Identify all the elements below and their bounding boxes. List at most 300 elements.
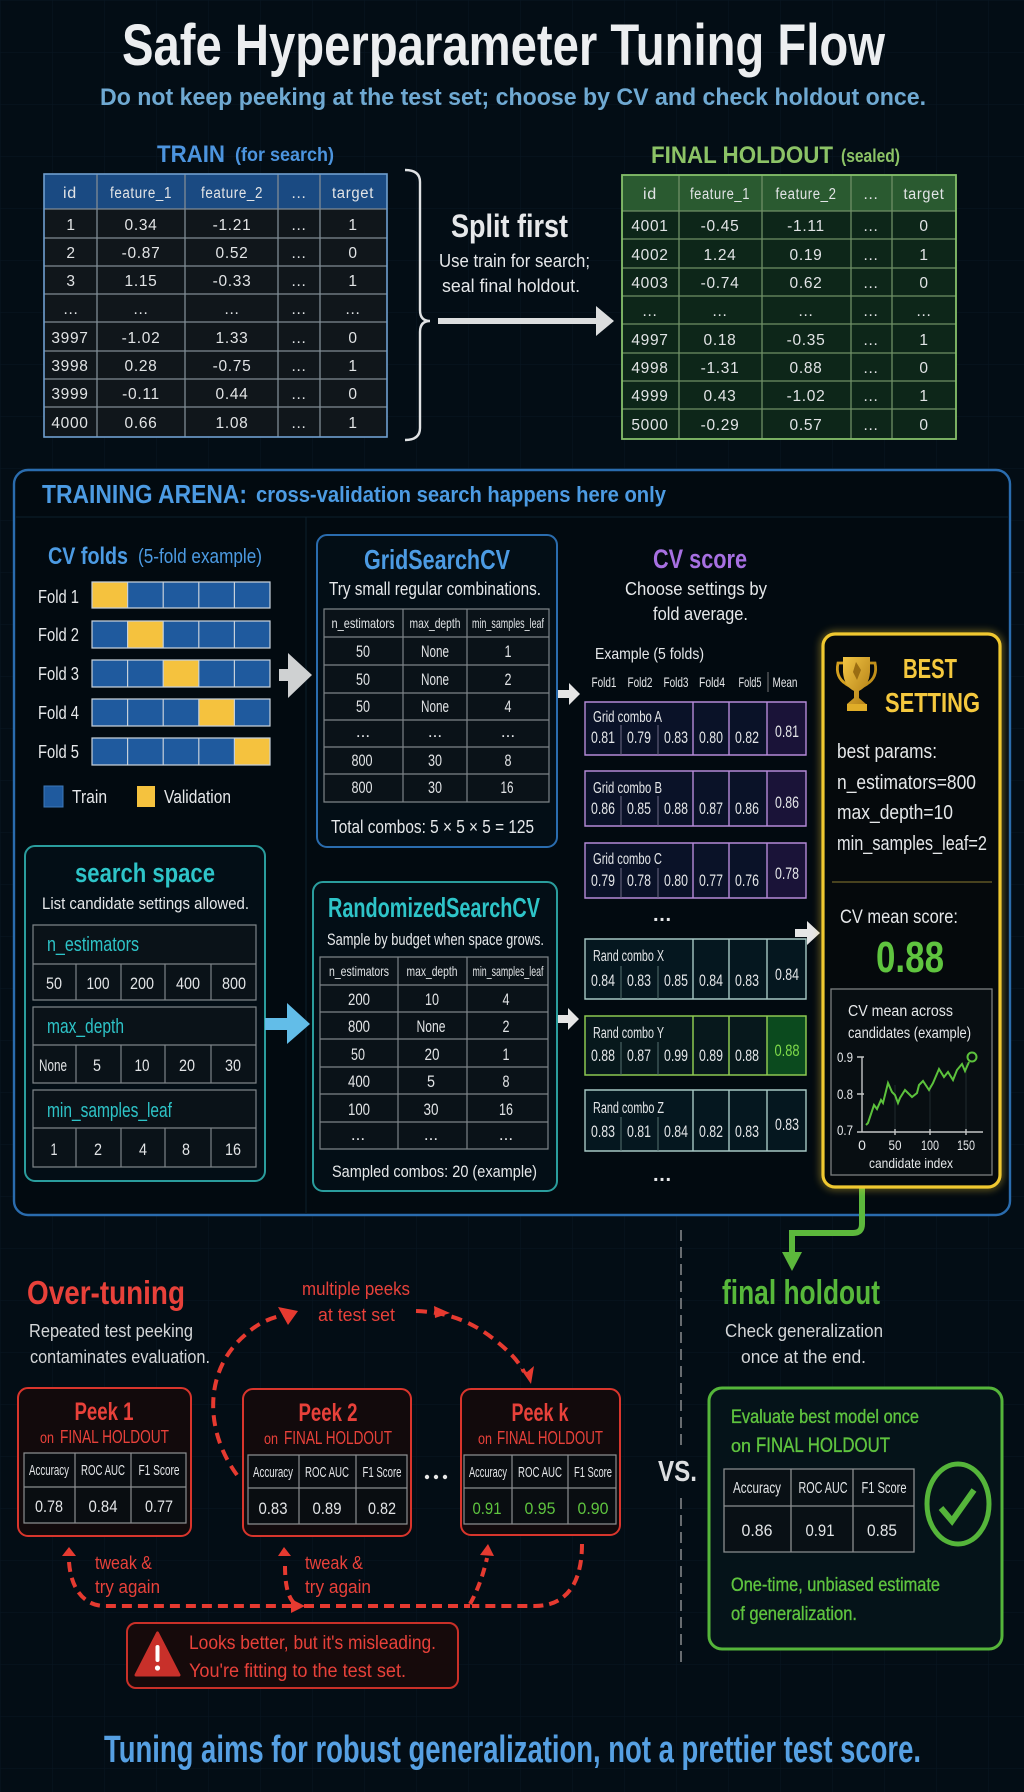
fold column headers: Fold1	[592, 674, 617, 690]
card: peek 2: Peek 2	[298, 1399, 358, 1427]
row: rand combo X: 0.84	[699, 972, 723, 990]
card: peek 1: FINAL HOLDOUT	[60, 1426, 169, 1447]
table: grid combos: 30	[428, 778, 442, 797]
fold column headers	[592, 672, 798, 692]
card: peek 2: Accuracy	[253, 1464, 293, 1481]
vs divider: VS.	[658, 1456, 697, 1488]
row: rand combo Z: 0.82	[699, 1123, 723, 1141]
card: evaluate once: FINAL HOLDOUT	[756, 1434, 890, 1457]
row: grid combo B: 0.85	[627, 800, 651, 818]
bracket	[405, 170, 430, 440]
card: peek k: 0.90	[578, 1499, 608, 1518]
over-tuning description: contaminates evaluation.	[30, 1347, 210, 1367]
panel: grid search	[317, 535, 557, 847]
label: tweak and try again 2	[305, 1553, 371, 1597]
table: final holdout data: -0.35	[787, 332, 825, 349]
table: train data: target	[332, 185, 374, 202]
chart: cv mean across candidates: 100	[921, 1137, 939, 1153]
table: final holdout data: ...	[916, 303, 932, 320]
table: train data: 3997	[51, 330, 89, 347]
fold column headers: Fold5	[738, 674, 762, 690]
table: min_samples_leaf: 2	[94, 1140, 102, 1159]
fold diagram: Fold 1	[38, 587, 79, 607]
panel: over-tuning	[18, 1274, 620, 1688]
row: rand combo Y: 0.99	[664, 1047, 688, 1065]
fold diagram: Fold 2	[38, 625, 79, 645]
row: grid combo A: 0.81	[591, 729, 615, 747]
chart: cv mean across candidates: 150	[957, 1137, 975, 1153]
table: final holdout data: 4002	[631, 247, 669, 264]
best params: max_depth=10	[837, 802, 953, 824]
table: sampled combos: 5	[427, 1072, 435, 1091]
chart: cv mean across candidates: candidate index	[869, 1155, 953, 1171]
row: grid combo C: 0.78	[775, 865, 799, 883]
table: train data: 0	[348, 386, 358, 403]
table: train data: -0.11	[122, 386, 160, 403]
table: final holdout data: 1	[919, 388, 929, 405]
heading: randomized search: RandomizedSearchCV	[328, 892, 540, 923]
row: grid combo B: 0.87	[699, 800, 723, 818]
table: sampled combos: ...	[351, 1125, 365, 1144]
table: final holdout data: 0.18	[704, 332, 736, 349]
table: grid combos: 8	[504, 751, 512, 770]
card: peek k	[461, 1389, 620, 1535]
chart: cv mean across candidates: 0.8	[837, 1086, 853, 1102]
row: grid combo C: 0.76	[735, 872, 759, 890]
fold diagram: Fold 4	[38, 703, 79, 723]
final holdout description: once at the end.	[741, 1347, 866, 1367]
panel: search space	[25, 846, 265, 1181]
fold diagram: Fold 5	[38, 742, 79, 762]
table: final holdout data: -0.29	[701, 417, 739, 434]
cv mean score: 0.88	[876, 933, 944, 982]
table: max_depth: max_depth	[47, 1016, 124, 1038]
table: final holdout data: ...	[863, 186, 879, 203]
table: final holdout data: ...	[863, 417, 879, 434]
table: sampled combos: 30	[424, 1100, 438, 1119]
fold column headers: Fold2	[628, 674, 653, 690]
table: train data: id	[63, 185, 77, 202]
table: grid combos: None	[421, 642, 449, 661]
text: split first: Split first	[451, 208, 568, 244]
arrow: grid search to scores	[558, 683, 580, 705]
row: rand combo X	[585, 939, 806, 999]
cv score description	[625, 579, 767, 624]
table: holdout metrics: 0.91	[806, 1521, 834, 1540]
row: rand combo Z: 0.83	[591, 1123, 615, 1141]
table: train data: ...	[224, 301, 240, 318]
label: tweak and try again 1: try again	[95, 1577, 160, 1597]
row: grid combo C	[585, 843, 806, 898]
table: final holdout data: feature_2	[776, 186, 836, 203]
table: n_estimators	[33, 925, 256, 1000]
card: peek 2	[243, 1389, 411, 1536]
fold column headers: Mean	[772, 674, 798, 690]
cv mean score	[840, 907, 958, 982]
table: holdout metrics	[724, 1469, 914, 1552]
heading: final holdout: final holdout	[722, 1274, 880, 1312]
table: final holdout data: 0.43	[704, 388, 736, 405]
fold diagram: Fold 3	[38, 664, 79, 684]
legend: Validation	[164, 787, 231, 807]
table: final holdout data: 4999	[631, 388, 669, 405]
table: train data: feature_2	[201, 185, 263, 202]
table: grid combos: None	[421, 697, 449, 716]
card: peek 1: F1 Score	[138, 1462, 180, 1479]
row: grid combo A: 0.81	[775, 723, 799, 741]
card: peek 1: on	[40, 1430, 54, 1447]
card: peek k: 0.95	[524, 1499, 556, 1518]
table: holdout metrics: Accuracy	[733, 1480, 781, 1497]
arena heading: TRAINING ARENA:	[42, 479, 247, 509]
chart: cv mean across candidates: CV mean across	[848, 1003, 953, 1020]
row: grid combo B	[585, 771, 806, 826]
heading: search space: search space	[75, 858, 215, 888]
ellipsis: ...	[653, 904, 671, 926]
text: split first: Use train for search;	[439, 251, 590, 271]
total combos: Total combos: 5 × 5 × 5 = 125	[331, 817, 534, 837]
label: multiple peeks: at test set	[318, 1305, 395, 1325]
label: multiple peeks	[302, 1279, 410, 1325]
row: rand combo X: 0.84	[775, 966, 799, 984]
table: sampled combos: min_samples_leaf	[472, 963, 544, 979]
table: train data: 1.15	[125, 273, 157, 290]
table: sampled combos	[320, 957, 548, 1149]
table: grid combos: max_depth	[410, 615, 460, 631]
table: sampled combos: None	[416, 1017, 446, 1036]
card: peek 1: 0.78	[35, 1497, 63, 1516]
table: final holdout data: ...	[798, 303, 814, 320]
table: holdout metrics: ROC AUC	[798, 1480, 848, 1497]
best params: best params:	[837, 741, 937, 763]
table: grid combos: 800	[352, 778, 372, 797]
card: evaluate once: on	[731, 1436, 751, 1456]
row: rand combo Y: 0.88	[774, 1042, 800, 1060]
best params: min_samples_leaf=2	[837, 833, 987, 855]
chart: cv mean across candidates: 0	[858, 1137, 866, 1153]
table: holdout metrics: 0.86	[742, 1521, 772, 1540]
table: final holdout data: ...	[642, 303, 658, 320]
table: grid combos: n_estimators	[332, 615, 394, 631]
callout: warning	[127, 1623, 458, 1688]
panel: cv score	[585, 544, 806, 1186]
row: rand combo Y: 0.88	[735, 1047, 759, 1065]
warning text: You're fitting to the test set.	[189, 1661, 406, 1682]
table: grid combos: ...	[428, 722, 442, 741]
label: tweak and try again 1	[95, 1553, 160, 1597]
panel: cv folds	[38, 543, 270, 807]
final holdout description	[725, 1321, 883, 1367]
table: grid combos: 50	[356, 642, 370, 661]
table: train data: ...	[291, 245, 307, 262]
card: peek 1: Accuracy	[29, 1462, 69, 1479]
arena heading	[42, 479, 667, 509]
ellipsis: ...	[653, 1164, 671, 1186]
connector: best setting to final holdout	[782, 1187, 862, 1271]
label: tweak and try again 1: tweak &	[95, 1553, 152, 1573]
row: rand combo Z	[585, 1090, 806, 1151]
table: train data: 0.34	[125, 217, 157, 234]
row: grid combo A: 0.83	[664, 729, 688, 747]
heading: best setting: BEST	[903, 653, 957, 684]
chart: cv mean across candidates: 0.9	[837, 1049, 853, 1065]
table: final holdout data: ...	[863, 275, 879, 292]
table: final holdout data: 5000	[631, 417, 669, 434]
table: final holdout data: -1.11	[787, 218, 825, 235]
heading: cv folds: CV folds	[48, 543, 128, 570]
table: final holdout data: 4001	[631, 218, 669, 235]
card: evaluate once	[709, 1388, 1002, 1649]
over-tuning description	[29, 1321, 210, 1367]
table: grid combos: 30	[428, 751, 442, 770]
row: grid combo A: 0.80	[699, 729, 723, 747]
arrow: scores to best setting	[795, 921, 820, 945]
randomized description: Sample by budget when space grows.	[327, 930, 544, 949]
table: final holdout data	[622, 175, 956, 439]
chart: cv mean across candidates: 50	[888, 1137, 902, 1153]
table: train data: 1.33	[216, 330, 248, 347]
table: sampled combos: 1	[502, 1045, 510, 1064]
row: grid combo B: 0.88	[664, 800, 688, 818]
table: final holdout data: 0.19	[790, 247, 822, 264]
legend	[44, 786, 231, 807]
row: grid combo C: Grid combo C	[593, 851, 662, 868]
table: final holdout data: 0	[919, 417, 929, 434]
table: train data: 1.08	[216, 415, 248, 432]
table: train data: 4000	[51, 415, 89, 432]
table: grid combos: 50	[356, 670, 370, 689]
table: train data: ...	[291, 185, 307, 202]
panel: final holdout evaluation	[709, 1274, 1002, 1649]
card: peek k: Peek k	[512, 1399, 569, 1427]
row: grid combo A: 0.82	[735, 729, 759, 747]
row: rand combo Z: 0.84	[664, 1123, 688, 1141]
table: final holdout data: 4003	[631, 275, 669, 292]
table: train data: ...	[291, 217, 307, 234]
card: peek 1: 0.77	[145, 1497, 173, 1516]
card: peek 2: 0.82	[368, 1499, 396, 1518]
panel: randomized search	[313, 882, 557, 1191]
table: train data: -0.75	[213, 358, 251, 375]
search space description: List candidate settings allowed.	[42, 894, 249, 913]
fold column headers: Fold3	[664, 674, 689, 690]
table: train data: feature_1	[110, 185, 172, 202]
table: final holdout data: -1.31	[701, 360, 739, 377]
table: final holdout data: -0.45	[701, 218, 739, 235]
table: grid combos: min_samples_leaf	[472, 615, 544, 631]
table: sampled combos: 400	[348, 1072, 370, 1091]
label: tweak and try again 2: try again	[305, 1577, 371, 1597]
table: train data: -1.21	[213, 217, 251, 234]
table: max_depth: None	[39, 1056, 67, 1075]
table: train data: 1	[66, 217, 76, 234]
table: train data: 0.52	[216, 245, 248, 262]
table: sampled combos: 50	[351, 1045, 365, 1064]
table: final holdout data: id	[643, 186, 657, 203]
table: train data: 1	[348, 415, 358, 432]
table: train data: ...	[291, 415, 307, 432]
label: tweak and try again 2: tweak &	[305, 1553, 363, 1573]
table: holdout metrics: 0.85	[867, 1521, 897, 1540]
heading: final holdout: (sealed)	[841, 146, 900, 166]
row: grid combo B: 0.86	[775, 794, 799, 812]
table: grid combos: 50	[356, 697, 370, 716]
row: grid combo C: 0.77	[699, 872, 723, 890]
arrow: peek 2 arc to label	[213, 1307, 298, 1475]
table: train data: -0.33	[213, 273, 251, 290]
table: n_estimators: n_estimators	[47, 934, 139, 956]
table: n_estimators: 50	[46, 974, 62, 993]
fold column headers: Fold4	[699, 674, 725, 690]
grid description: Try small regular combinations.	[329, 579, 541, 599]
table: sampled combos: ...	[499, 1125, 513, 1144]
table: final holdout data: 0	[919, 360, 929, 377]
row: grid combo C: 0.80	[664, 872, 688, 890]
table: train data: -1.02	[122, 330, 160, 347]
table: grid combos: 800	[352, 751, 372, 770]
table: n_estimators: 200	[130, 974, 154, 993]
row: rand combo Z: 0.81	[627, 1123, 651, 1141]
table: train data: ...	[345, 301, 361, 318]
row: grid combo B: 0.86	[591, 800, 615, 818]
table: final holdout data: ...	[863, 303, 879, 320]
ellipsis between peeks	[425, 1475, 447, 1479]
table: final holdout data: 4998	[631, 360, 669, 377]
table: n_estimators: 800	[222, 974, 246, 993]
table: sampled combos: max_depth	[406, 963, 458, 979]
arrow: split to holdout	[438, 306, 614, 336]
table: n_estimators: 400	[176, 974, 200, 993]
table: final holdout data: -1.02	[787, 388, 825, 405]
table: grid combos: None	[421, 670, 449, 689]
table: final holdout data: 4997	[631, 332, 669, 349]
row: rand combo Z: 0.83	[735, 1123, 759, 1141]
arrow: tweak loop bottom	[62, 1544, 582, 1613]
icon: warning triangle	[136, 1633, 179, 1675]
heading: cv score: CV score	[653, 544, 747, 574]
card: peek 2: ROC AUC	[305, 1464, 349, 1481]
row: rand combo X: 0.83	[735, 972, 759, 990]
table: final holdout data: ...	[712, 303, 728, 320]
table: train data: ...	[291, 301, 307, 318]
table: max_depth	[33, 1007, 256, 1083]
table: train data: ...	[291, 386, 307, 403]
table: sampled combos: 800	[348, 1017, 370, 1036]
table: final holdout data: 0	[919, 218, 929, 235]
card: peek 2: 0.89	[312, 1499, 342, 1518]
table: min_samples_leaf: 4	[139, 1140, 147, 1159]
row: rand combo Y: 0.88	[591, 1047, 615, 1065]
heading: train: (for search)	[235, 145, 334, 166]
table: grid combos: ...	[501, 722, 515, 741]
table: sampled combos: 8	[502, 1072, 510, 1091]
table: train data: 0	[348, 245, 358, 262]
text: split first: seal final holdout.	[442, 276, 580, 296]
heading: train: TRAIN	[157, 141, 225, 168]
panel: training arena	[14, 470, 1010, 1215]
heading: over-tuning: Over-tuning	[27, 1274, 185, 1311]
table: train data: ...	[291, 273, 307, 290]
card: peek k: 0.91	[472, 1499, 502, 1518]
table: train data: 1	[348, 358, 358, 375]
table: train data: 0.66	[125, 415, 157, 432]
table: sampled combos: 2	[502, 1017, 510, 1036]
heading: final holdout: FINAL HOLDOUT	[651, 142, 833, 169]
over-tuning description: Repeated test peeking	[29, 1321, 193, 1341]
heading: cv folds	[48, 543, 262, 570]
legend: Train	[72, 787, 107, 807]
table: min_samples_leaf: 8	[182, 1140, 190, 1159]
final holdout description: Check generalization	[725, 1321, 883, 1341]
table: final holdout data: -0.74	[701, 275, 739, 292]
card: peek k: ROC AUC	[518, 1464, 562, 1481]
table: grid combos: 4	[504, 697, 512, 716]
table: min_samples_leaf: min_samples_leaf	[47, 1100, 172, 1122]
cv score description: Choose settings by	[625, 579, 767, 599]
table: final holdout data: 1	[919, 247, 929, 264]
row: rand combo Y: 0.89	[699, 1047, 723, 1065]
icon: trophy	[837, 657, 876, 711]
sampled combos note: Sampled combos: 20 (example)	[332, 1162, 537, 1181]
heading: train	[157, 141, 334, 168]
cv score description: fold average.	[653, 604, 748, 624]
table: final holdout data: feature_1	[690, 186, 750, 203]
card: peek 2: F1 Score	[362, 1464, 402, 1481]
table: train data: ...	[291, 358, 307, 375]
row: grid combo B: Grid combo B	[593, 780, 662, 797]
subtitle: Do not keep peeking at the test set; choose by CV and check holdout once.	[100, 84, 926, 111]
card: evaluate once: One-time, unbiased estimate	[731, 1575, 940, 1596]
table: train data: -0.87	[122, 245, 160, 262]
table: min_samples_leaf: 16	[225, 1140, 241, 1159]
warning text	[189, 1633, 436, 1682]
table: train data: 3	[66, 273, 76, 290]
table: train data: 2	[66, 245, 76, 262]
table: final holdout data: ...	[863, 388, 879, 405]
table: final holdout data: ...	[863, 360, 879, 377]
arrow: randomized search to scores	[558, 1008, 579, 1030]
table: max_depth: 5	[93, 1056, 101, 1075]
fold diagram	[38, 582, 270, 765]
chart: cv mean across candidates	[831, 989, 992, 1175]
card: peek 2: FINAL HOLDOUT	[284, 1427, 392, 1448]
table: train data: ...	[133, 301, 149, 318]
table: sampled combos: 10	[425, 990, 439, 1009]
icon: check mark	[927, 1464, 989, 1544]
table: train data: ...	[291, 330, 307, 347]
table: sampled combos: 100	[348, 1100, 370, 1119]
card: peek 1	[18, 1388, 191, 1536]
text: split first	[439, 208, 590, 296]
table: final holdout data: 0.57	[790, 417, 822, 434]
table: sampled combos: ...	[424, 1125, 438, 1144]
card: evaluate once: Evaluate best model once	[731, 1407, 919, 1428]
table: grid combos: 1	[504, 642, 512, 661]
card: peek k: Accuracy	[469, 1464, 507, 1481]
card: peek k: F1 Score	[574, 1464, 612, 1481]
table: train data	[44, 174, 387, 437]
table: train data: 0	[348, 330, 358, 347]
row: rand combo Z: Rand combo Z	[593, 1100, 664, 1117]
row: grid combo B: 0.86	[735, 800, 759, 818]
table: sampled combos: n_estimators	[329, 963, 389, 979]
card: evaluate once: of generalization.	[731, 1604, 857, 1625]
example label: Example (5 folds)	[595, 646, 704, 663]
arrow: label arc to peek k	[416, 1306, 534, 1384]
table: final holdout data: 1.24	[704, 247, 736, 264]
row: rand combo X: 0.83	[627, 972, 651, 990]
table: grid combos: 16	[500, 778, 514, 797]
